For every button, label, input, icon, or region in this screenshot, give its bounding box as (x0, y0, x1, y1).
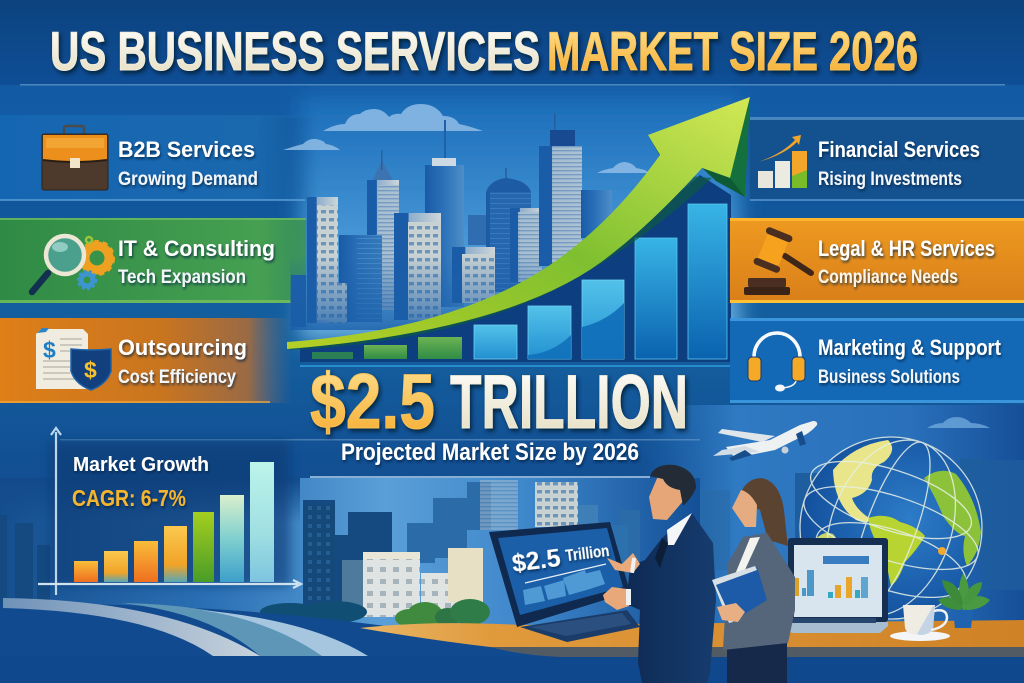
x axis arrow (38, 580, 301, 588)
person: man in suit (603, 465, 716, 683)
icon: airplane (713, 421, 817, 461)
person: woman with folder (712, 478, 795, 683)
arrow: growth trend (287, 97, 750, 350)
heading: Outsourcing: Outsourcing (118, 335, 247, 360)
subheading: projected market size: Projected Market Size by 2026 (341, 439, 639, 466)
headline: $2.5 trillion: $2.5 (310, 357, 435, 445)
laptop: dashboard (785, 538, 888, 633)
bar chart: market growth bars (300, 175, 731, 367)
headline: $2.5 trillion: TRILLION (450, 360, 688, 445)
panel: marketing and support (730, 318, 1024, 403)
icon: briefcase (42, 126, 108, 190)
label: CAGR: CAGR: 6-7% (72, 485, 186, 511)
icon: headset (748, 333, 805, 392)
text: Tech Expansion: Tech Expansion (118, 267, 246, 288)
text: Compliance Needs: Compliance Needs (818, 267, 958, 288)
label: laptop value: Trillion (564, 541, 610, 565)
icon: document and shield: $ (84, 357, 97, 383)
text: Business Solutions: Business Solutions (818, 367, 960, 388)
desk (360, 620, 1024, 657)
road (0, 598, 1024, 683)
label: laptop value (510, 538, 611, 578)
heading: B2B Services: B2B Services (118, 137, 255, 162)
bar chart: market growth panel (38, 428, 301, 595)
panel: B2B services (0, 115, 320, 201)
panel: financial services (750, 117, 1024, 201)
icon: gavel (744, 226, 811, 295)
icon: rising bars (758, 135, 807, 188)
icon: coffee cup (890, 605, 950, 641)
growth bars (74, 462, 274, 582)
title: US BUSINESS SERVICES (50, 20, 540, 82)
heading: IT & Consulting: IT & Consulting (118, 236, 275, 261)
panel: IT and consulting (0, 218, 306, 303)
icon: magnifier and gears (32, 236, 113, 292)
label: laptop value: $2.5 (510, 544, 562, 578)
globe (795, 422, 987, 634)
clouds above city (283, 104, 650, 173)
label: market growth: Market Growth (73, 454, 209, 476)
heading: Financial Services: Financial Services (818, 137, 980, 162)
laptop: $2.5 trillion screen (489, 522, 640, 642)
city skyline (290, 113, 612, 330)
headline: $2.5 trillion (310, 357, 688, 445)
panel: outsourcing (0, 318, 292, 403)
icon: document and shield (36, 328, 111, 390)
text: Cost Efficiency: Cost Efficiency (118, 367, 236, 388)
text: Growing Demand: Growing Demand (118, 169, 258, 190)
cloud: right sky (927, 417, 990, 428)
icon: potted plant (938, 573, 990, 628)
text: Rising Investments: Rising Investments (818, 169, 962, 190)
bottom sky and skyline (0, 405, 1024, 660)
icon: document and shield: $ (43, 337, 56, 363)
panel: legal and HR (730, 218, 1024, 303)
y axis arrow (51, 428, 61, 595)
